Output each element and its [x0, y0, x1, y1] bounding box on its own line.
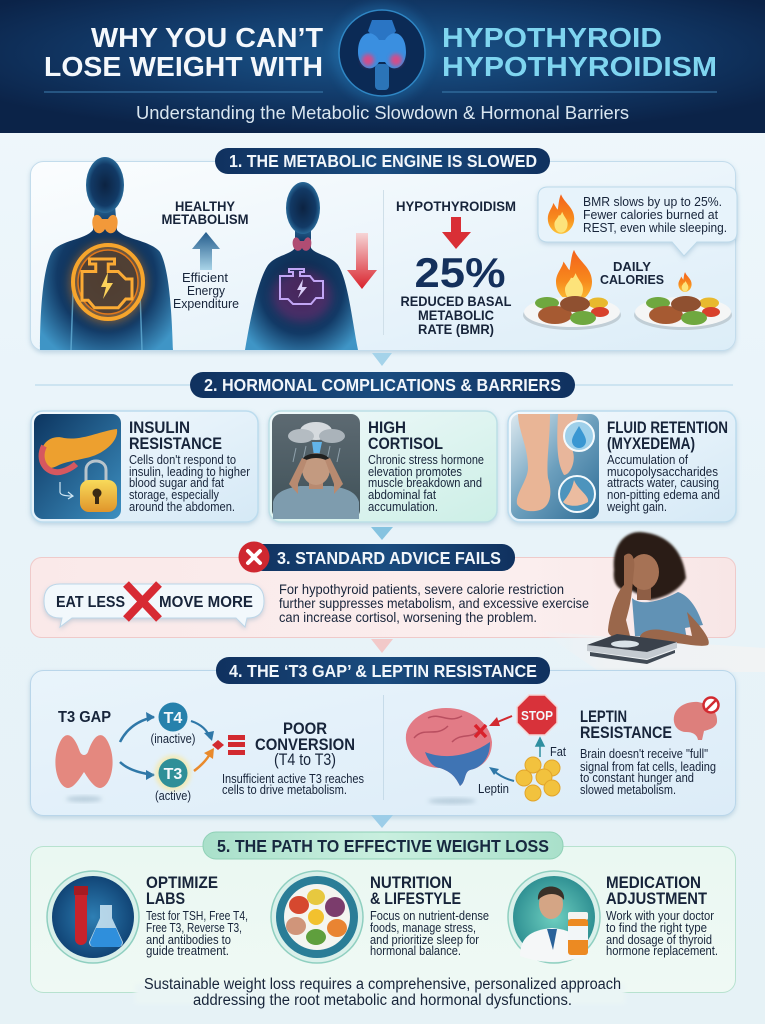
title left: LOSE WEIGHT WITH — [44, 51, 323, 82]
panel: section 3 standard advice fails — [30, 542, 736, 638]
header banner — [0, 0, 765, 133]
diagram: T4 T3 conversion: (active) — [155, 788, 191, 803]
panel: section 4 T3 gap and leptin resistance — [30, 657, 736, 816]
text: closing statement: addressing the root metabolic and hormonal dysfunctions. — [193, 992, 572, 1009]
text: efficient energy expenditure: Energy — [187, 283, 225, 298]
text: hypothyroidism stat: HYPOTHYROIDISM — [396, 199, 516, 214]
text: hypothyroidism stat — [396, 199, 516, 337]
text: hypothyroidism stat: 25% — [414, 249, 506, 296]
text: leptin resistance: RESISTANCE — [580, 724, 672, 742]
text: high cortisol: abdominal fat — [368, 487, 436, 502]
text: advice explanation — [279, 581, 589, 625]
text: fluid retention: Accumulation of — [607, 452, 688, 467]
callout: BMR slows — [538, 187, 737, 256]
heading: section 3 — [250, 544, 515, 571]
text: poor conversion: CONVERSION — [255, 736, 355, 754]
text: poor conversion: Insufficient active T3 reaches — [222, 771, 364, 786]
text: daily calories: CALORIES — [600, 272, 664, 287]
text: insulin resistance: storage, especially — [129, 487, 219, 502]
callout: eat less move more: MOVE MORE — [159, 594, 253, 611]
arrow: down red — [347, 233, 377, 289]
icon: thyroid orange — [92, 215, 118, 233]
text: nutrition and lifestyle: foods, manage stress, — [370, 920, 476, 935]
diagram: T4 T3 conversion — [120, 702, 245, 803]
text: fluid retention: attracts water, causing — [607, 475, 719, 490]
panel: section 1 metabolic engine — [30, 148, 737, 350]
icon: bathroom scale — [587, 634, 677, 664]
text: medication adjustment: and dosage of thyroid — [606, 932, 712, 947]
icon: pancreas and lock — [34, 414, 121, 519]
text: high cortisol: elevation promotes — [368, 464, 462, 479]
icon: thyroid emblem — [332, 3, 432, 103]
arrow: section 2 to 3 — [371, 527, 393, 540]
text: leptin resistance — [580, 708, 716, 797]
heading: section 5: 5. THE PATH TO EFFECTIVE WEIGHT LOSS — [217, 836, 549, 856]
arrow: section 4 to 5 — [371, 815, 393, 828]
icon: stop sign: STOP — [521, 708, 553, 723]
subtitle: Understanding the Metabolic Slowdown & Hormonal Barriers — [136, 103, 629, 123]
arrow: fat to stop — [536, 738, 544, 757]
text: medication adjustment: hormone replacement. — [606, 943, 718, 958]
text: high cortisol: CORTISOL — [368, 435, 443, 453]
text: leptin resistance: signal from fat cells, leading — [580, 759, 716, 774]
diagram: T4 T3 conversion: T3 — [164, 766, 182, 783]
callout: BMR slows: BMR slows by up to 25%. — [583, 194, 722, 209]
text: advice explanation: further suppresses metabolism, and excessive exercise — [279, 595, 589, 611]
icon: plate with large flame — [523, 250, 621, 330]
text: optimize labs: OPTIMIZE — [146, 874, 218, 892]
text: fluid retention — [606, 419, 728, 514]
icon: dim engine — [272, 269, 332, 322]
icon: stop sign — [517, 695, 557, 735]
text: fluid retention: weight gain. — [606, 499, 667, 514]
diagram: T4 T3 conversion: T4 — [164, 710, 182, 727]
text: nutrition and lifestyle: Focus on nutrient-dense — [370, 908, 489, 923]
text: daily calories — [600, 259, 664, 287]
text: high cortisol: HIGH — [368, 419, 406, 437]
text: fat: Fat — [550, 744, 566, 759]
healthy body figure — [40, 157, 173, 350]
icon: stressed man under cloud — [272, 414, 360, 519]
icon: plate with small flame — [634, 272, 732, 330]
text: optimize labs: LABS — [146, 890, 185, 908]
text: hypothyroidism stat: REDUCED BASAL — [400, 294, 512, 309]
text: optimize labs: Test for TSH, Free T4, — [146, 908, 248, 923]
icon: small brain with prohibition — [674, 698, 718, 740]
text: T3 gap: T3 GAP — [58, 709, 111, 726]
text: advice explanation: can increase cortisol, worsening the problem. — [279, 609, 537, 625]
callout: BMR slows: REST, even while sleeping. — [583, 220, 727, 235]
text: medication adjustment: MEDICATION — [606, 874, 701, 892]
icon: glowing engine — [70, 243, 146, 323]
text: high cortisol: muscle breakdown and — [368, 475, 482, 490]
text: hypothyroidism stat: RATE (BMR) — [418, 322, 494, 337]
text: leptin resistance: Brain doesn't receive "full" — [580, 746, 708, 761]
panel: fluid retention — [508, 411, 736, 522]
title left: WHY YOU CAN’T — [91, 22, 323, 53]
text: optimize labs: and antibodies to — [146, 932, 231, 947]
icon: dim thyroid — [293, 237, 311, 251]
icon: flame — [548, 194, 574, 234]
icon: red stop bars — [212, 735, 245, 755]
icon: healthy food plate — [271, 871, 363, 963]
illustration: frustrated woman with scale — [540, 532, 765, 672]
text: healthy metabolism: HEALTHY — [175, 199, 235, 214]
text: nutrition and lifestyle: & LIFESTYLE — [370, 890, 461, 908]
callout: eat less move more: EAT LESS — [56, 594, 125, 611]
diagram: T4 T3 conversion: (inactive) — [150, 731, 196, 746]
text: insulin resistance: around the abdomen. — [129, 499, 235, 514]
title right: HYPOTHYROIDISM — [442, 51, 717, 82]
text: efficient energy expenditure: Expenditure — [173, 296, 239, 311]
text: nutrition and lifestyle — [370, 874, 489, 958]
arrow: red to brain — [489, 716, 512, 726]
panel: insulin resistance — [31, 411, 258, 522]
text: leptin resistance: slowed metabolism. — [580, 782, 676, 797]
text: leptin resistance: to constant hunger and — [580, 770, 694, 785]
text: high cortisol: Chronic stress hormone — [368, 452, 484, 467]
text: poor conversion — [222, 720, 364, 797]
text: poor conversion: POOR — [283, 720, 327, 738]
title right: HYPOTHYROID — [442, 22, 662, 53]
text: advice explanation: For hypothyroid patients, severe calorie restriction — [279, 581, 564, 597]
callout: eat less move more — [44, 584, 264, 627]
arrow: leptin to brain — [489, 767, 514, 781]
heading: section 2: 2. HORMONAL COMPLICATIONS & BARRIERS — [204, 375, 561, 395]
icon: red cross — [126, 584, 159, 619]
text: fluid retention: non-pitting edema and — [607, 487, 720, 502]
text: insulin resistance: Cells don't respond to — [129, 452, 236, 467]
text: leptin: Leptin — [478, 781, 509, 796]
text: fluid retention: FLUID RETENTION — [607, 419, 728, 437]
icon: thyroid gland — [55, 735, 113, 802]
text: medication adjustment: ADJUSTMENT — [606, 890, 707, 908]
panel: section 5 path to weight loss — [30, 832, 736, 1004]
text: optimize labs: Free T3, Reverse T3, — [146, 920, 242, 935]
heading: section 1: 1. THE METABOLIC ENGINE IS SLOWED — [229, 151, 537, 171]
arrow: red down — [442, 217, 471, 249]
title right — [442, 22, 717, 82]
text: nutrition and lifestyle: hormonal balance. — [370, 943, 461, 958]
title left — [44, 22, 323, 82]
text: medication adjustment: to find the right type — [606, 920, 707, 935]
heading: section 4 — [216, 657, 550, 684]
arrow: up — [192, 232, 220, 270]
text: leptin resistance: LEPTIN — [580, 708, 627, 726]
text: high cortisol — [368, 419, 484, 514]
arrow: section 1 to 2 — [372, 353, 392, 366]
heading: section 3: 3. STANDARD ADVICE FAILS — [277, 548, 501, 568]
icon: swollen legs — [511, 414, 599, 519]
text: fluid retention: mucopolysaccharides — [607, 464, 718, 479]
icon: fat cells — [516, 757, 560, 801]
text: efficient energy expenditure — [173, 270, 239, 311]
text: insulin resistance: blood sugar and fat — [129, 475, 224, 490]
arrow: section 3 to 4 — [371, 639, 393, 653]
text: poor conversion: cells to drive metabolism. — [222, 782, 347, 797]
text: optimize labs: guide treatment. — [146, 943, 229, 958]
text: medication adjustment — [606, 874, 718, 958]
panel: high cortisol — [269, 411, 497, 522]
text: insulin resistance: insulin, leading to higher — [129, 464, 251, 479]
text: healthy metabolism: METABOLISM — [162, 212, 248, 227]
callout: BMR slows: Fewer calories burned at — [583, 207, 718, 222]
text: nutrition and lifestyle: and prioritize sleep for — [370, 932, 480, 947]
hypothyroid body figure — [245, 182, 358, 350]
text: healthy metabolism — [162, 199, 248, 227]
text: nutrition and lifestyle: NUTRITION — [370, 874, 452, 892]
text: fluid retention: (MYXEDEMA) — [607, 435, 695, 453]
text: closing statement — [144, 976, 621, 1009]
heading: section 4: 4. THE ‘T3 GAP’ & LEPTIN RESISTANCE — [229, 661, 537, 681]
icon: doctor with medication — [508, 871, 600, 963]
text: poor conversion: (T4 to T3) — [274, 751, 336, 769]
text: efficient energy expenditure: Efficient — [182, 270, 228, 285]
text: insulin resistance — [129, 419, 251, 514]
heading: section 2 — [35, 372, 733, 398]
text: optimize labs — [146, 874, 248, 958]
icon: lab tube and flask — [47, 871, 139, 963]
text: hypothyroidism stat: METABOLIC — [418, 308, 494, 323]
text: insulin resistance: RESISTANCE — [129, 435, 222, 453]
icon: red x badge — [238, 542, 270, 572]
heading: section 5 — [203, 832, 563, 859]
text: closing statement: Sustainable weight loss requires a comprehensive, personalized approach — [144, 976, 621, 993]
text: medication adjustment: Work with your doctor — [606, 908, 715, 923]
text: daily calories: DAILY — [613, 259, 651, 274]
icon: brain with blocked signal — [406, 708, 492, 804]
text: high cortisol: accumulation. — [368, 499, 438, 514]
text: insulin resistance: INSULIN — [129, 419, 190, 437]
